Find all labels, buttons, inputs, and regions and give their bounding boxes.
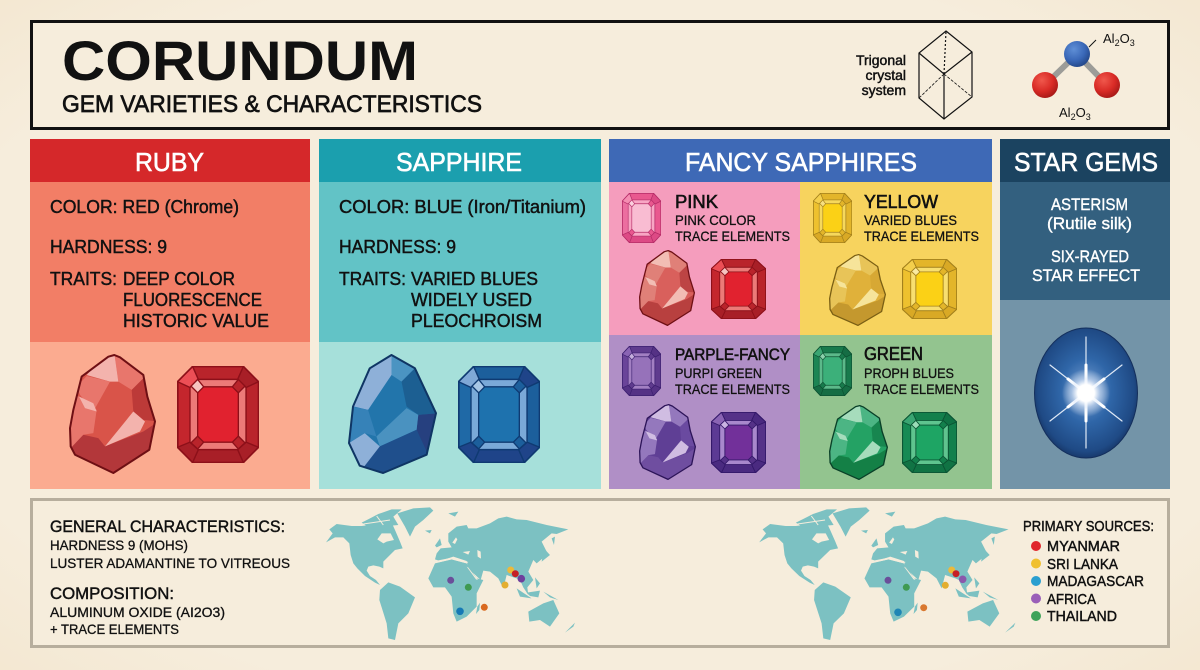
pink text (675, 192, 790, 244)
yellow text: VARIED BLUES (864, 212, 957, 228)
composition text: COMPOSITION: (50, 584, 174, 603)
ruby properties: COLOR: RED (Chrome) (50, 197, 239, 217)
general characteristics text: GENERAL CHARACTERISTICS: (50, 517, 285, 536)
star gems heading: STAR GEMS (1014, 147, 1158, 177)
sapphire properties: WIDELY USED (411, 290, 532, 310)
icon: molecule: 3 (1130, 38, 1135, 48)
cell: purple (609, 335, 800, 489)
cell: yellow (800, 182, 992, 335)
general characteristics text: HARDNESS 9 (MOHS) (50, 537, 188, 553)
legend: primary sources: MYANMAR (1047, 538, 1120, 555)
icon: small yellow gem (813, 193, 852, 243)
star gems heading (1000, 139, 1170, 182)
composition text: ALUMINUM OXIDE (AI2O3) (50, 604, 225, 620)
panel: fancy sapphires (609, 139, 992, 489)
purple text (675, 345, 790, 397)
sapphire properties: PLEOCHROISM (411, 311, 542, 331)
panel: sapphire (319, 139, 601, 489)
sapphire heading (319, 139, 601, 182)
icon: small purple gem (622, 346, 661, 396)
green text (864, 344, 979, 397)
general characteristics text (50, 517, 290, 571)
icon: cut purple gem (711, 412, 766, 473)
pink text: TRACE ELEMENTS (675, 228, 790, 244)
legend: primary sources: MADAGASCAR (1047, 573, 1144, 590)
ruby properties: HISTORIC VALUE (123, 311, 269, 331)
icon: molecule: 2 (1071, 112, 1076, 122)
sapphire properties: HARDNESS: 9 (339, 237, 456, 257)
ruby properties: HARDNESS: 9 (50, 237, 167, 257)
green text: GREEN (864, 344, 923, 364)
crystal system label: crystal (866, 67, 906, 83)
yellow text (864, 192, 979, 244)
cell: pink (609, 182, 800, 335)
sapphire properties: VARIED BLUES (411, 269, 538, 289)
icon: cut ruby (178, 367, 258, 462)
icon: rough purple gem (637, 404, 698, 480)
legend: primary sources (1023, 518, 1154, 625)
icon: molecule: 3 (1086, 112, 1091, 122)
sapphire properties: TRAITS: (339, 269, 406, 289)
legend: primary sources: SRI LANKA (1047, 556, 1118, 573)
panel: general characteristics and sources (32, 500, 1168, 646)
icon: small pink gem (622, 193, 661, 243)
world map left (326, 507, 575, 640)
panel: ruby (30, 139, 310, 489)
icon: molecule: Al (1103, 31, 1115, 46)
legend: primary sources: THAILAND (1047, 608, 1117, 625)
composition text: + TRACE ELEMENTS (50, 621, 179, 637)
yellow text: YELLOW (864, 192, 938, 212)
crystal system label (856, 52, 906, 98)
icon: star sapphire (1034, 328, 1138, 458)
star gems properties: SIX-RAYED (1051, 247, 1129, 266)
purple text: PURPI GREEN (675, 365, 762, 381)
ruby properties: TRAITS: (50, 269, 117, 289)
pink text: PINK (675, 192, 718, 212)
legend: primary sources: PRIMARY SOURCES: (1023, 518, 1154, 535)
panel: header (32, 22, 1168, 128)
crystal system label: Trigonal (856, 52, 906, 68)
green text: PROPH BLUES (864, 365, 954, 381)
icon: cut sapphire (459, 367, 539, 462)
ruby heading: RUBY (135, 147, 204, 177)
icon: trigonal crystal (919, 31, 972, 119)
subtitle: GEM VARIETIES & CHARACTERISTICS (62, 91, 482, 118)
icon: rough pink gem (637, 250, 697, 326)
icon: molecule: O (1076, 105, 1086, 120)
pink text: PINK COLOR (675, 212, 756, 228)
icon: cut green gem (902, 412, 957, 473)
star gems properties: ASTERISM (1051, 195, 1128, 214)
general characteristics text: LUSTER ADAMANTINE TO VITREOUS (50, 555, 290, 571)
ruby heading (30, 139, 310, 182)
icon: molecule: O (1120, 31, 1130, 46)
icon: molecule: 2 (1115, 38, 1120, 48)
green text: TRACE ELEMENTS (864, 381, 979, 397)
purple text: PARPLE-FANCY (675, 345, 790, 364)
icon: cut pink gem (711, 259, 766, 319)
sapphire heading: SAPPHIRE (396, 147, 522, 177)
title: CORUNDUM (62, 29, 418, 92)
icon: rough ruby (67, 353, 158, 475)
ruby properties (50, 197, 269, 331)
panel: star gems (1000, 139, 1170, 489)
crystal system label: system (862, 82, 906, 98)
purple text: TRACE ELEMENTS (675, 381, 790, 397)
icon: rough green gem (827, 405, 890, 480)
icon: rough yellow gem (827, 254, 888, 326)
icon: rough sapphire (346, 353, 438, 475)
star gems properties: (Rutile silk) (1047, 214, 1132, 233)
ruby properties: DEEP COLOR (123, 269, 235, 289)
star gems properties (1032, 195, 1140, 285)
icon: small green gem (813, 346, 852, 396)
composition text (50, 584, 225, 637)
cell: green (800, 335, 992, 489)
world map right (759, 507, 1015, 640)
sapphire properties: COLOR: BLUE (Iron/Titanium) (339, 197, 586, 217)
yellow text: TRACE ELEMENTS (864, 228, 979, 244)
sapphire properties (339, 197, 586, 331)
fancy sapphires heading: FANCY SAPPHIRES (685, 147, 917, 177)
fancy sapphires heading (609, 139, 992, 182)
icon: molecule: Al (1059, 105, 1071, 120)
star gems properties: STAR EFFECT (1032, 266, 1140, 285)
ruby properties: FLUORESCENCE (123, 290, 262, 310)
legend: primary sources: AFRICA (1047, 591, 1096, 608)
icon: molecule (1032, 31, 1135, 122)
icon: cut yellow gem (902, 259, 957, 319)
